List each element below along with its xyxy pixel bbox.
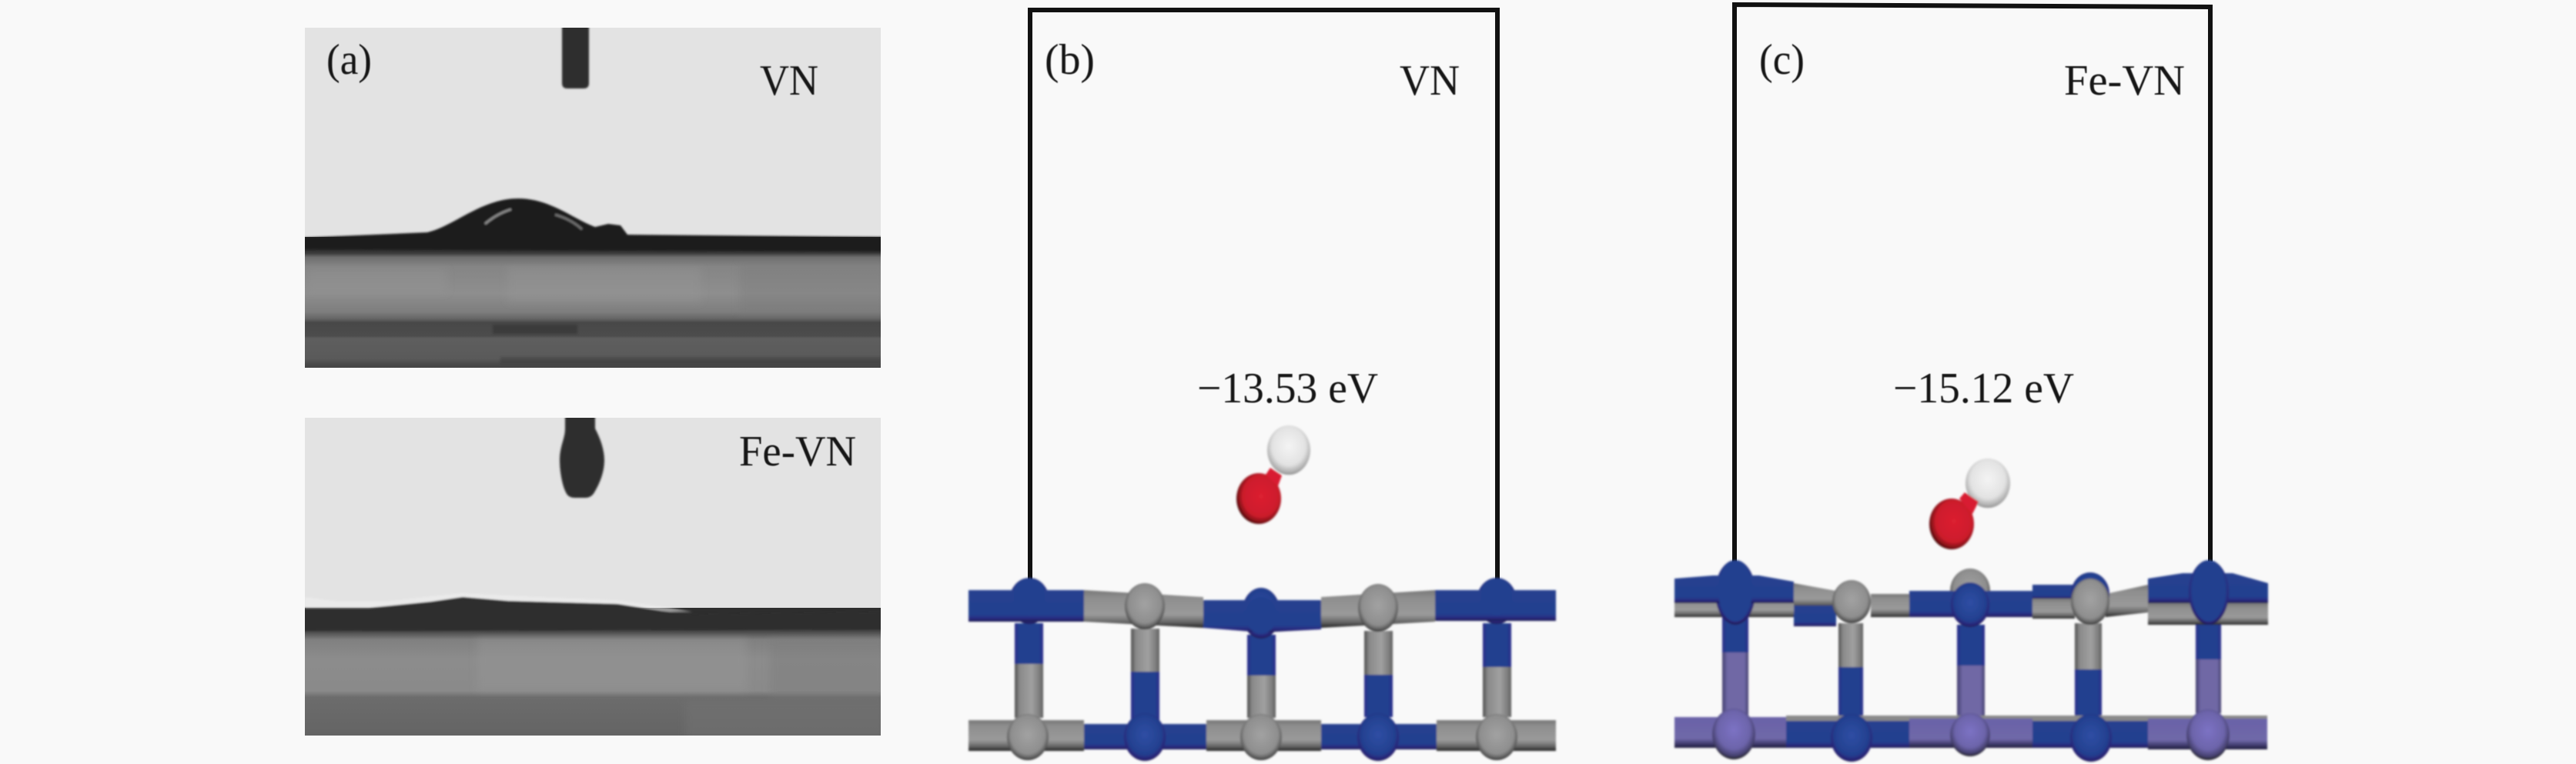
atomic slab: VN [969, 578, 1556, 761]
label: Fe-VN: Fe-VN [2064, 57, 2185, 105]
panel c: Fe-VN slab with adsorbed OH [1674, 5, 2268, 762]
panel a: contact angle photographs [300, 23, 885, 739]
label: adsorption energy: −13.53 eV [1197, 365, 1378, 412]
label: (b): (b) [1045, 36, 1095, 84]
label: adsorption energy: −15.12 eV [1893, 365, 2074, 412]
molecule: OH [1236, 425, 1310, 524]
atomic slab: Fe-doped VN [1674, 560, 2268, 762]
photo: VN water droplet on surface [300, 23, 885, 368]
label: VN: VN [760, 57, 818, 105]
simulation cell frame [1030, 10, 1497, 581]
label: (c): (c) [1759, 36, 1805, 84]
label: (a): (a) [326, 36, 372, 84]
panel b: VN slab with adsorbed OH [969, 10, 1556, 761]
simulation cell frame [1735, 5, 2210, 565]
molecule: OH [1929, 459, 2010, 549]
label: Fe-VN: Fe-VN [739, 428, 856, 475]
photo: Fe-VN flattened droplet on surface [300, 412, 885, 739]
label: VN: VN [1400, 57, 1460, 105]
